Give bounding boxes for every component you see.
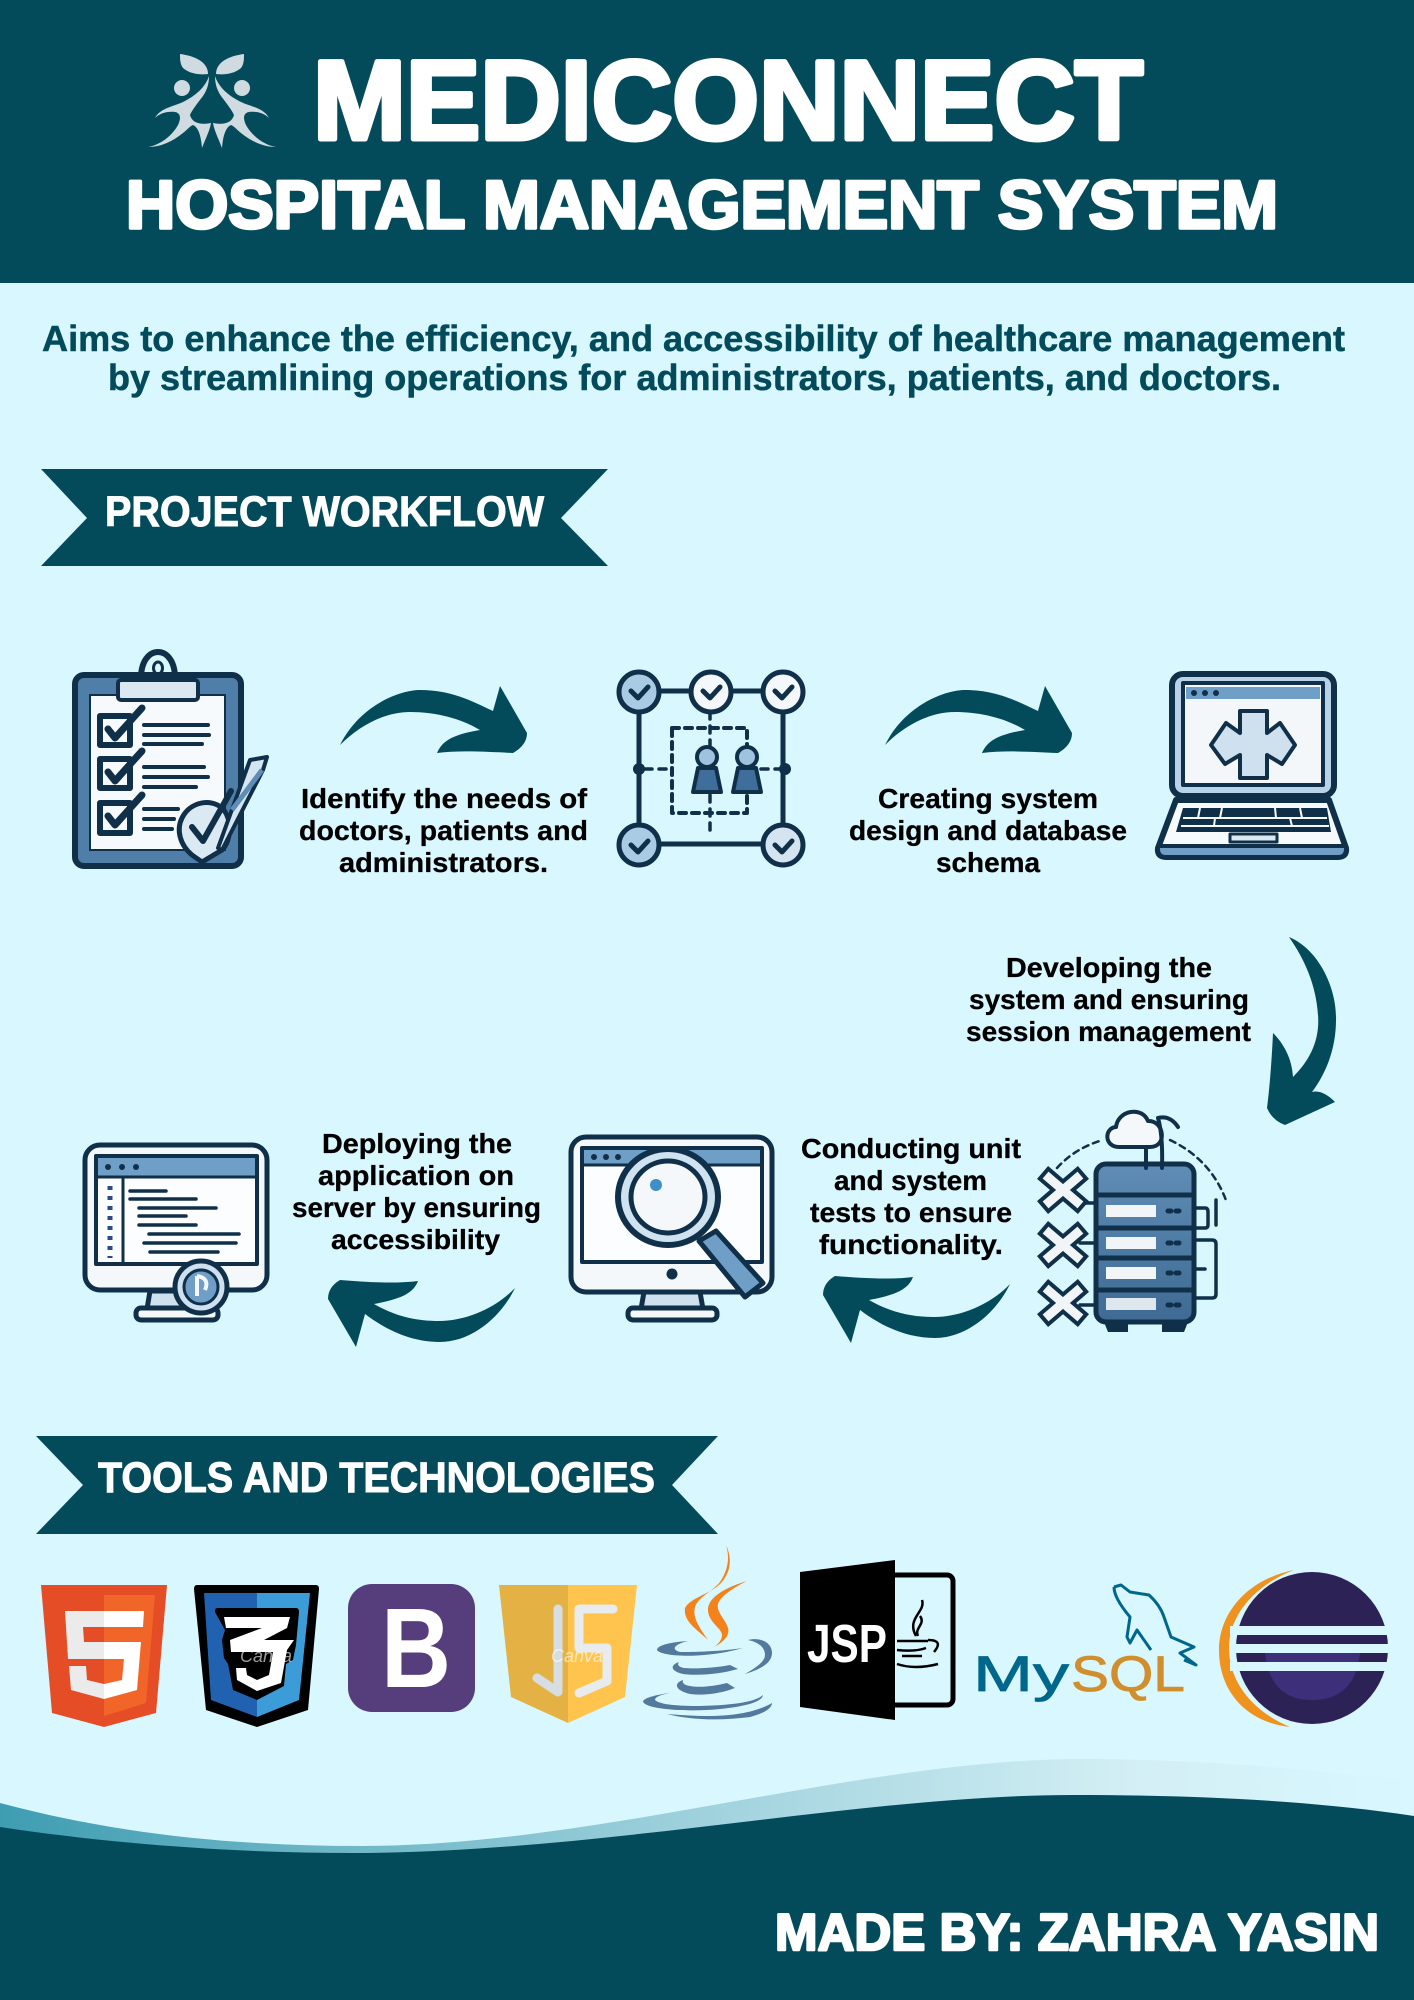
logo: JSP: JSP xyxy=(807,1614,887,1674)
icon: monitor with magnifier xyxy=(571,1137,772,1320)
step text: testing: and system xyxy=(834,1165,987,1196)
step text: identify needs: doctors, patients and xyxy=(299,815,588,846)
logo: MySQL: My xyxy=(973,1646,1069,1702)
banner: tools and technologies: TOOLS AND TECHNOLOGIES xyxy=(98,1454,655,1502)
logo: CSS3: Canva xyxy=(240,1646,292,1666)
logo: Bootstrap xyxy=(348,1584,475,1712)
arrow: step four to five xyxy=(823,1276,1010,1343)
intro text xyxy=(42,318,1345,398)
intro text: by streamlining operations for administrators, patients, and doctors. xyxy=(108,357,1281,398)
banner: project workflow: PROJECT WORKFLOW xyxy=(105,488,544,536)
header band xyxy=(0,0,1414,283)
logo: JSP xyxy=(800,1560,953,1720)
step text: testing: Conducting unit xyxy=(801,1133,1021,1164)
step text: development xyxy=(966,952,1251,1047)
step text: deployment: accessibility xyxy=(331,1224,500,1255)
banner: tools and technologies xyxy=(36,1436,718,1534)
step text: deployment: server by ensuring xyxy=(292,1192,541,1223)
step text: identify needs xyxy=(299,783,588,878)
footer wave xyxy=(0,1759,1414,2000)
subtitle heading: HOSPITAL MANAGEMENT SYSTEM xyxy=(126,167,1278,243)
step text: system design xyxy=(849,783,1127,878)
intro text: Aims to enhance the efficiency, and accessibility of healthcare management xyxy=(42,318,1345,359)
step text: system design: design and database xyxy=(849,815,1127,846)
banner: project workflow xyxy=(41,469,608,566)
step text: system design: schema xyxy=(936,847,1040,878)
step text: identify needs: administrators. xyxy=(339,847,548,878)
step text: development: Developing the xyxy=(1006,952,1212,983)
step text: identify needs: Identify the needs of xyxy=(301,783,588,814)
step text: development: session management xyxy=(966,1016,1251,1047)
icon: system design network xyxy=(619,672,803,865)
icon: clipboard checklist xyxy=(75,652,267,866)
logo: Eclipse xyxy=(1219,1570,1395,1727)
step text: deployment: application on xyxy=(318,1160,514,1191)
logo: HTML5 xyxy=(41,1585,167,1727)
arrow: step five to six xyxy=(328,1280,515,1347)
step text: development: system and ensuring xyxy=(969,984,1249,1015)
logo: MySQL: SQL xyxy=(1071,1646,1185,1702)
logo: JavaScript xyxy=(499,1585,637,1723)
step text: testing: functionality. xyxy=(819,1229,1003,1260)
title: MEDICONNECT xyxy=(313,38,1143,163)
logo: MySQL xyxy=(973,1585,1196,1702)
step text: deployment xyxy=(292,1128,541,1255)
logo: CSS3 xyxy=(194,1585,319,1727)
footer credit: MADE BY: ZAHRA YASIN xyxy=(775,1904,1379,1962)
icon: people and leaves logo xyxy=(148,54,276,148)
icon: server rack with cloud xyxy=(1049,1112,1227,1332)
step text: deployment: Deploying the xyxy=(322,1128,512,1159)
step text: testing xyxy=(801,1133,1021,1260)
icon: monitor with code xyxy=(85,1145,267,1320)
arrow: step two to three xyxy=(885,686,1072,753)
arrow: step three to four xyxy=(1267,937,1336,1125)
logo: JavaScript: Canva xyxy=(551,1646,603,1666)
logo: Java xyxy=(643,1545,772,1719)
step text: testing: tests to ensure xyxy=(810,1197,1012,1228)
arrow: step one to two xyxy=(340,686,527,753)
step text: system design: Creating system xyxy=(878,783,1098,814)
icon: laptop with medical cross xyxy=(1158,674,1346,857)
logo: Bootstrap: B xyxy=(381,1585,451,1711)
